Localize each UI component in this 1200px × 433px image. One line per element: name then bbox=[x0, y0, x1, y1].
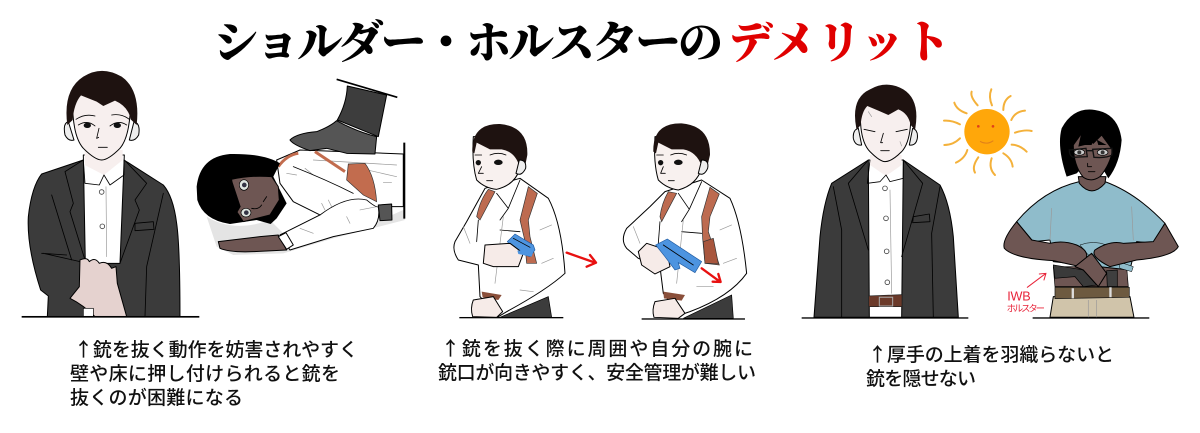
caption: concealment: ↑厚手の上着を羽織らないと bbox=[868, 340, 1114, 367]
illustration: person lifting T-shirt to show IWB holster bbox=[1004, 110, 1178, 319]
illustration: man drawing pistol, muzzle toward own arm bbox=[623, 123, 747, 320]
arrow: muzzle sweep bbox=[567, 253, 596, 267]
ears bbox=[64, 122, 139, 140]
illustration: man drawing pistol, muzzle toward surroundings bbox=[454, 124, 565, 318]
title bbox=[213, 18, 950, 68]
caption: obstruction: ↑銃を抜く動作を妨害されやすく bbox=[74, 335, 358, 362]
boot bbox=[290, 121, 377, 154]
hair bbox=[66, 71, 137, 125]
caption: muzzle direction bbox=[438, 334, 756, 384]
leather belt bbox=[869, 295, 902, 307]
belt bbox=[1055, 287, 1129, 299]
panel: concealment bbox=[802, 85, 1178, 319]
icon: smiling sun bbox=[944, 89, 1032, 175]
label: IWB holster: ホルスター bbox=[1007, 303, 1045, 313]
label: IWB holster bbox=[1007, 290, 1045, 313]
title: ショルダー・ホルスターの bbox=[213, 18, 723, 68]
holster and magazine pouch bbox=[1053, 265, 1098, 287]
belt bbox=[482, 292, 502, 300]
panel: drawing is obstructed bbox=[22, 71, 405, 318]
caption: muzzle direction: 銃口が向きやすく、安全管理が難しい bbox=[438, 362, 756, 384]
caption: muzzle direction: ↑銃を抜く際に周囲や自分の腕に bbox=[441, 334, 753, 361]
face bbox=[73, 93, 131, 160]
hand on floor bbox=[218, 235, 287, 252]
caption: obstruction bbox=[70, 335, 358, 409]
caption: concealment bbox=[866, 340, 1114, 390]
shoulder holster bbox=[347, 163, 377, 202]
caption: concealment: 銃を隠せない bbox=[866, 368, 976, 390]
caption: obstruction: 抜くのが困難になる bbox=[70, 387, 243, 409]
hand gripping wrist bbox=[70, 259, 127, 317]
hair and face bbox=[197, 154, 287, 224]
caption: obstruction: 壁や床に押し付けられると銃を bbox=[70, 363, 340, 385]
panel: muzzle direction bbox=[454, 123, 747, 320]
illustration: person pinned to the floor under a boot bbox=[197, 79, 405, 255]
title: デメリット bbox=[728, 18, 950, 68]
blue pistol bbox=[507, 234, 535, 257]
label: IWB holster: IWB bbox=[1007, 290, 1031, 304]
blue pistol bbox=[656, 239, 702, 273]
arrow: pointing to IWB holster bbox=[1027, 273, 1046, 287]
illustration: man in jacket with wrist grabbed bbox=[22, 71, 199, 318]
trouser leg bbox=[337, 86, 387, 137]
illustration: sweating man in jacket bbox=[802, 85, 968, 319]
